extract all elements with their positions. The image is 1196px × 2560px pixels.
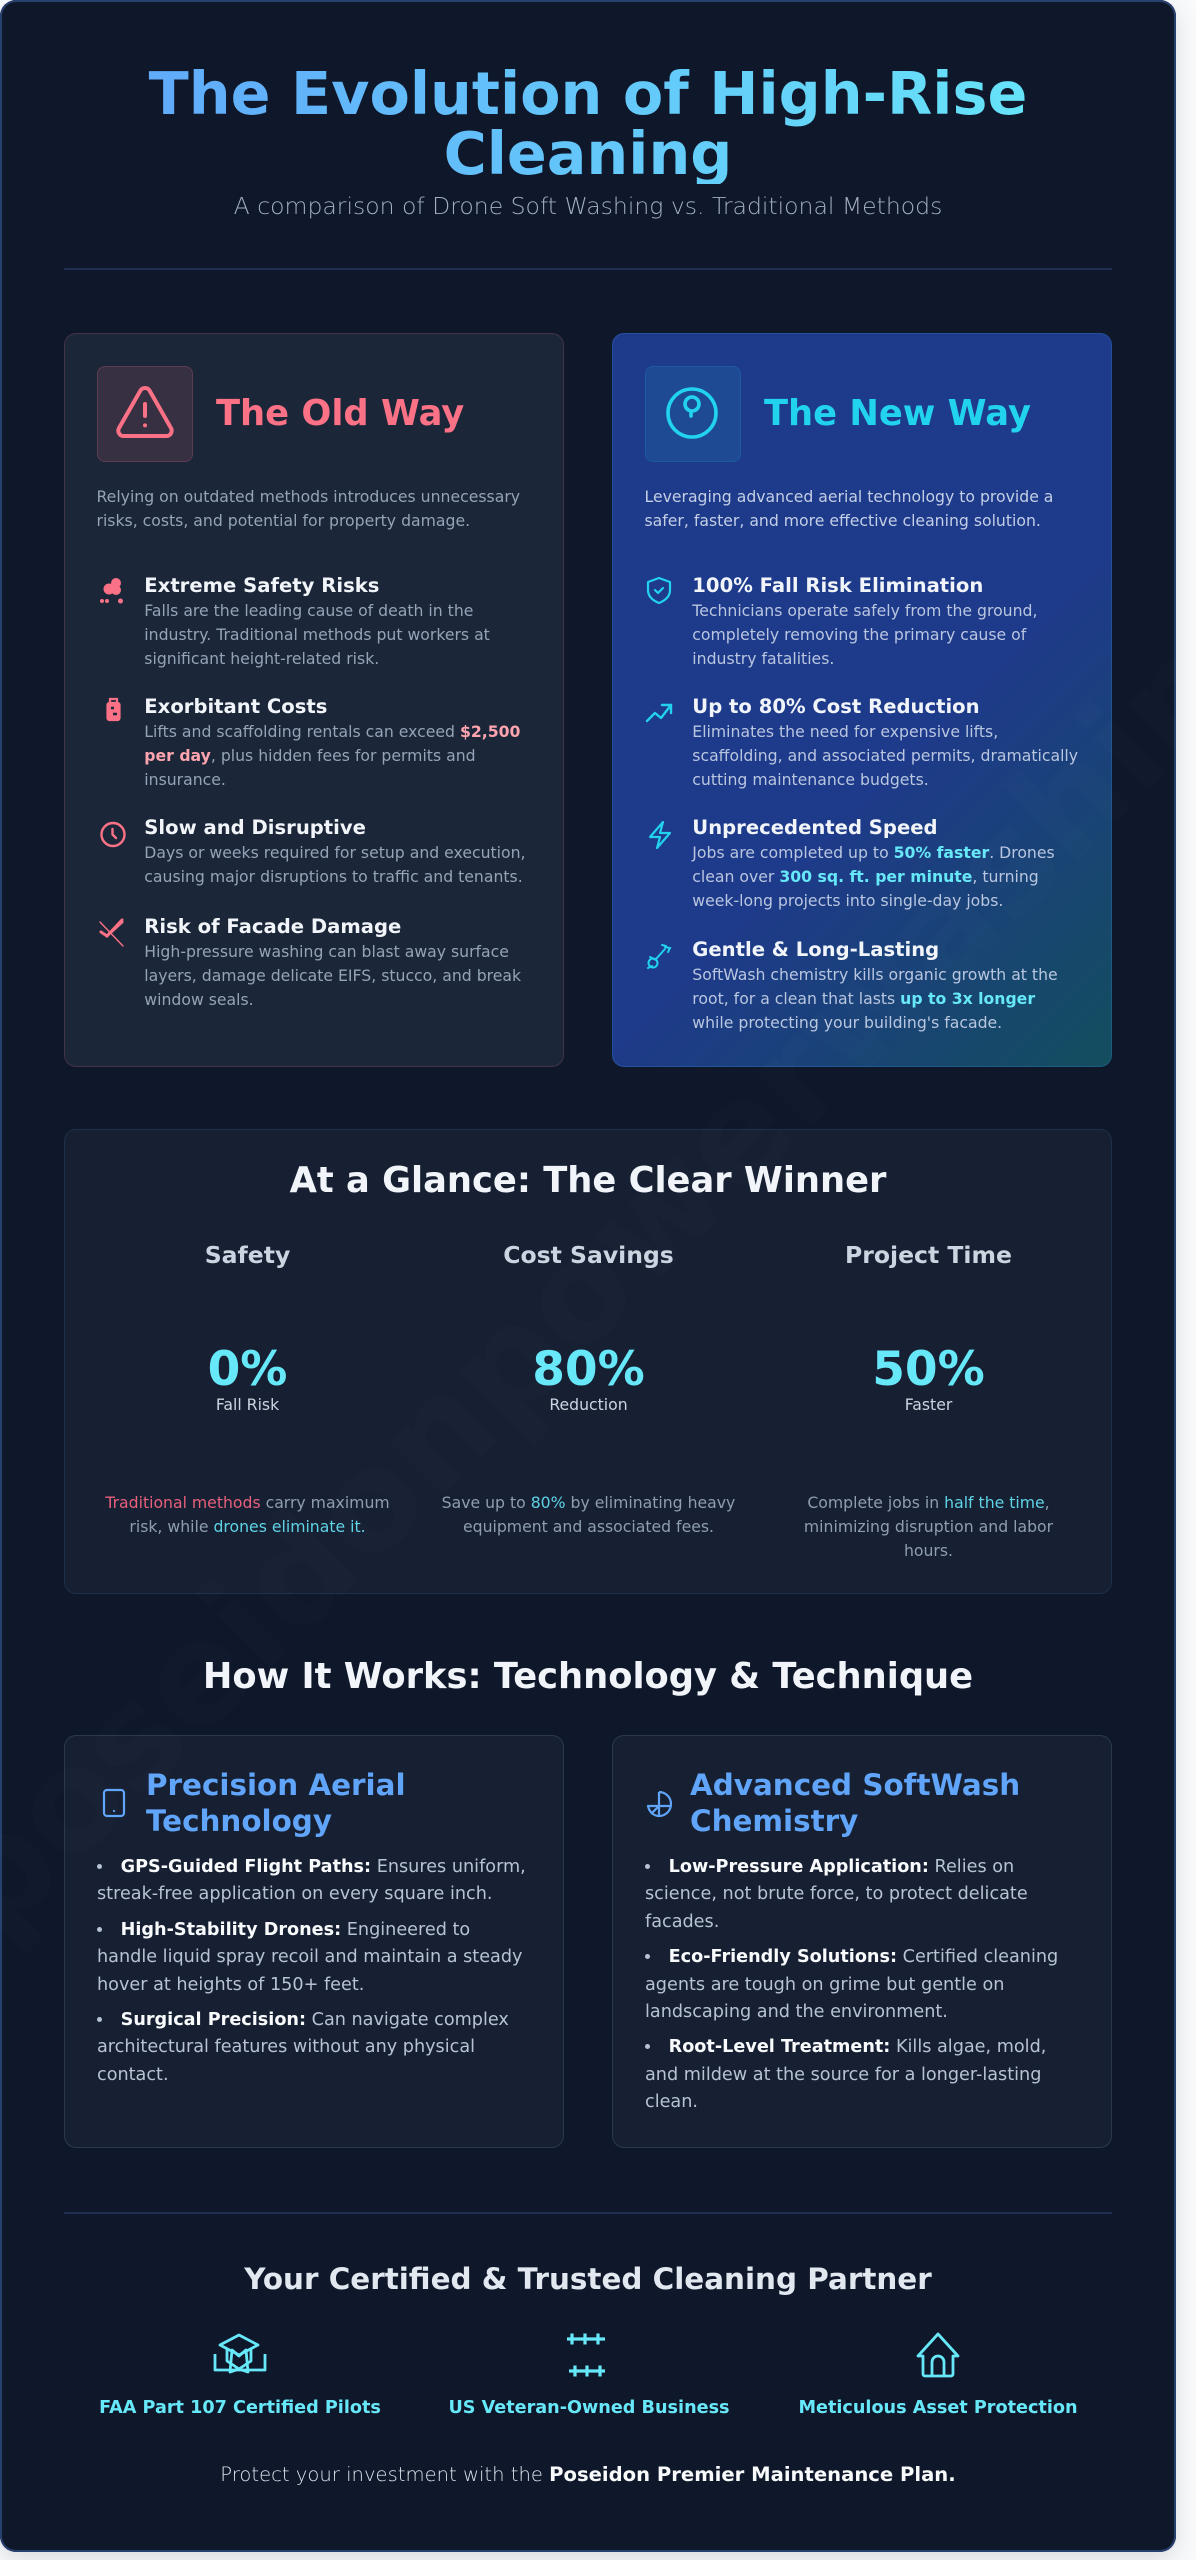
icon: money bag [106, 698, 121, 722]
bullet list: science, not brute force, to protect delicate [645, 1884, 1028, 1904]
description: industry fatalities. [692, 649, 834, 668]
bullet list: GPS-Guided Flight Paths: Ensures uniform, [121, 1857, 526, 1877]
caption: risk, while drones eliminate it. [129, 1517, 366, 1536]
description: High-pressure washing can blast away surface [144, 942, 509, 961]
bullet list: High-Stability Drones: Engineered to [121, 1920, 470, 1940]
icon: graduation cap [214, 2334, 266, 2374]
caption [442, 1493, 735, 1536]
item: exorbitant costs [106, 695, 520, 789]
description: significant height-related risk. [144, 649, 379, 668]
description: clean over 300 sq. ft. per minute, turning [692, 867, 1039, 886]
icon: lightning bolt [648, 820, 672, 850]
bullet list: handle liquid spray recoil and maintain a steady [97, 1947, 522, 1967]
bullet list: Low-Pressure Application: Relies on [669, 1857, 1014, 1877]
description [144, 843, 526, 886]
description: layers, damage delicate EIFS, stucco, and break [144, 966, 521, 985]
column: safety [105, 1241, 390, 1536]
bullet list: landscaping and the environment. [645, 2002, 948, 2022]
caption: hours. [904, 1541, 953, 1560]
description [691, 843, 1055, 910]
caption [804, 1493, 1054, 1560]
text: Up to 80% Cost Reduction [692, 695, 980, 718]
heading: Precision Aerial [146, 1768, 406, 1802]
icon: spray nozzle [647, 944, 672, 969]
heading [690, 1768, 1020, 1838]
bullet list: Root-Level Treatment: Kills algae, mold, [669, 2037, 1046, 2057]
description [144, 722, 520, 789]
bullet list: hover at heights of 150+ feet. [97, 1975, 364, 1995]
description [144, 942, 521, 1009]
bullet list: contact. [97, 2065, 169, 2085]
panel: the new way [612, 333, 1112, 1067]
bullet list: Eco-Friendly Solutions: Certified cleaning [669, 1947, 1058, 1967]
caption: Complete jobs in half the time, [807, 1493, 1050, 1512]
subtitle: A comparison of Drone Soft Washing vs. Traditional Methods [234, 192, 942, 220]
label: faa certified: FAA Part 107 Certified Pilots [99, 2398, 381, 2418]
caption: equipment and associated fees. [463, 1517, 714, 1536]
bullet list: Surgical Precision: Can navigate complex [121, 2010, 509, 2030]
description: week-long projects into single-day jobs. [692, 891, 1003, 910]
column: project time [804, 1241, 1054, 1560]
description [144, 601, 490, 668]
icon: safety blobs [100, 578, 123, 604]
item: gentle and long-lasting [647, 938, 1058, 1032]
icon: veteran stars [567, 2334, 605, 2376]
icon: shield check [646, 576, 672, 604]
heading: Advanced SoftWash [690, 1768, 1020, 1802]
description: insurance. [144, 770, 226, 789]
icon: house [916, 2332, 960, 2378]
column heading: Project Time [845, 1241, 1012, 1269]
icon: trending up [646, 704, 672, 722]
item: risk of facade damage [99, 915, 521, 1009]
description: completely removing the primary cause of [692, 625, 1026, 644]
description: SoftWash chemistry kills organic growth at the [692, 965, 1058, 984]
description: window seals. [144, 990, 254, 1009]
text: Unprecedented Speed [692, 816, 938, 839]
text: 100% Fall Risk Elimination [692, 574, 983, 597]
icon: clock [100, 822, 126, 848]
title: Cleaning [444, 119, 732, 188]
description [692, 965, 1058, 1032]
heading: trusted partner: Your Certified & Trusted Cleaning Partner [244, 2262, 932, 2296]
column heading: Safety [205, 1241, 290, 1269]
column: cost savings [442, 1241, 735, 1536]
heading [146, 1768, 406, 1838]
intro text [644, 487, 1053, 530]
stat: 50%: 50% [872, 1342, 985, 1397]
label: asset protection: Meticulous Asset Protection [798, 2398, 1078, 2418]
text: Slow and Disruptive [144, 816, 366, 839]
description: Jobs are completed up to 50% faster. Drones [692, 843, 1055, 862]
panel: the old way [64, 333, 564, 1067]
caption: minimizing disruption and labor [804, 1517, 1053, 1536]
intro text: risks, costs, and potential for property damage. [96, 511, 470, 530]
description: Eliminates the need for expensive lifts, [692, 722, 998, 741]
stat: 0%: 0% [208, 1342, 287, 1397]
bullet list [97, 1857, 526, 2085]
text: Extreme Safety Risks [144, 574, 379, 597]
closing statement: Protect your investment with the Poseidon Premier Maintenance Plan. [220, 2463, 956, 2486]
description: Days or weeks required for setup and execution, [144, 843, 526, 862]
description: while protecting your building's facade. [692, 1013, 1002, 1032]
description: Falls are the leading cause of death in the [144, 601, 473, 620]
panel: precision aerial technology [64, 1735, 564, 2148]
icon: chemistry dish [646, 1790, 672, 1818]
heading: the old way: The Old Way [216, 393, 464, 434]
stat: 80%: 80% [532, 1342, 645, 1397]
heading: at a glance: At a Glance: The Clear Winner [290, 1160, 886, 1201]
text: Exorbitant Costs [144, 695, 327, 718]
heading: Chemistry [690, 1804, 858, 1838]
description: Lifts and scaffolding rentals can exceed $2,500 [144, 722, 520, 741]
intro text: Leveraging advanced aerial technology to provide a [644, 487, 1053, 506]
stat label: Faster [905, 1395, 952, 1414]
description: per day, plus hidden fees for permits and [144, 746, 476, 765]
title: The Evolution of High-Rise [149, 59, 1027, 128]
bullet list [645, 1857, 1058, 2112]
stat label: Reduction [549, 1395, 628, 1414]
caption [105, 1493, 390, 1536]
caption: Save up to 80% by eliminating heavy [442, 1493, 735, 1512]
icon: warning triangle [97, 366, 193, 462]
heading: how it works: How It Works: Technology & Technique [203, 1656, 973, 1697]
text: Risk of Facade Damage [144, 915, 401, 938]
intro text: Relying on outdated methods introduces unnecessary [96, 487, 520, 506]
description: cutting maintenance budgets. [692, 770, 929, 789]
panel: advanced softwash chemistry [612, 1735, 1112, 2148]
panel: at a glance [64, 1129, 1112, 1594]
text: Gentle & Long-Lasting [692, 938, 939, 961]
description: root, for a clean that lasts up to 3x longer [692, 989, 1035, 1008]
description [692, 722, 1078, 789]
bullet list: clean. [645, 2092, 698, 2112]
caption: Traditional methods carry maximum [105, 1493, 390, 1512]
title [64, 64, 1112, 184]
description: causing major disruptions to traffic and tenants. [144, 867, 523, 886]
bullet list: architectural features without any physical [97, 2037, 475, 2057]
intro text: safer, faster, and more effective cleaning solution. [644, 511, 1041, 530]
bullet list: and mildew at the source for a longer-lasting [645, 2065, 1041, 2085]
intro text [96, 487, 520, 530]
heading: Technology [146, 1804, 332, 1838]
column heading: Cost Savings [503, 1241, 674, 1269]
description: industry. Traditional methods put workers at [144, 625, 490, 644]
heading: the new way: The New Way [764, 393, 1031, 434]
bullet list: agents are tough on grime but gentle on [645, 1975, 1004, 1995]
item: extreme safety risks [100, 574, 490, 668]
item: unprecedented speed [648, 816, 1055, 910]
item: slow and disruptive [100, 816, 526, 886]
description [692, 601, 1037, 668]
bullet list: streak-free application on every square inch. [97, 1884, 492, 1904]
item: fall risk elimination [646, 574, 1037, 668]
item: cost reduction [646, 695, 1078, 789]
label: veteran owned: US Veteran-Owned Business [448, 2398, 730, 2418]
stat label: Fall Risk [216, 1395, 279, 1414]
description: scaffolding, and associated permits, dramatically [692, 746, 1078, 765]
icon: tablet [102, 1788, 126, 1818]
description: Technicians operate safely from the ground, [692, 601, 1037, 620]
bullet list: facades. [645, 1912, 719, 1932]
icon: drone circle [645, 366, 741, 462]
icon: crossed tools [99, 918, 124, 947]
